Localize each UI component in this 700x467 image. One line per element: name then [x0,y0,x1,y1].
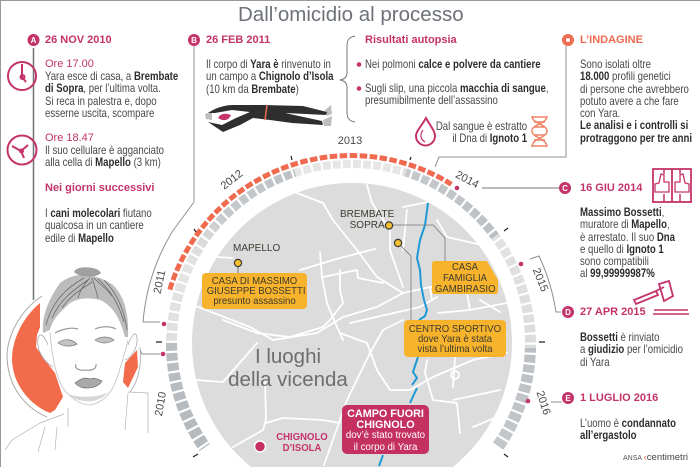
year 2014: 2014 [453,169,481,191]
box text: centro sportivo: vista l’ultima volta [418,343,492,355]
marker D [562,306,574,318]
icon: blood drop [416,118,435,146]
icon: clock 18.47 [8,136,36,164]
icon: gavel [634,281,689,314]
heading C: 16 GIU 2014 [580,182,642,194]
timeline ring: grey segments [166,160,536,467]
text: trial: di Yara [580,355,610,369]
marker A [28,34,40,46]
box text: campo [346,408,425,453]
connector lines and map markers [234,222,445,452]
text: DNA extracted: il Dna di Ignoto 1 [452,131,527,145]
text: DNA extracted [436,119,527,145]
text: blood stain [365,81,549,107]
ears [38,334,137,367]
text: arrest: sono compatibili [580,254,649,268]
year 2011: 2011 [152,269,168,295]
marker E [562,392,574,404]
icon: clock 17.00 [8,62,36,90]
text: body found: (10 km da Brembate) [206,82,299,96]
timeline lines [34,46,566,402]
map of the places [192,183,512,467]
map title: della vicenda [228,368,348,391]
text: sentence: all’ergastolo [580,428,637,442]
orange elapsed-time arc [170,156,451,290]
box text: casa Gambirasio: FAMIGLIA [443,272,487,284]
box text: casa Gambirasio: CASA [452,261,478,273]
label box: campo fuori Chignolo [342,405,429,454]
box text: campo: dov’è stato trovato [346,430,425,441]
river [379,203,428,466]
text: arrest: al 99,99999987% [580,266,655,280]
text: trial: Bossetti è rinviato [580,330,660,344]
box text: casa Bossetti: presunto assassino [213,295,296,307]
icon: DNA [532,116,547,147]
credit: ANSA ‹centimetri [623,452,688,463]
text: arrest: e quello di Ignoto 1 [580,242,664,256]
ring gaps and mask [160,155,542,467]
text: investigation: Le analisi e i controlli si [580,118,688,132]
text: Yara leaves home: esserne uscita, scompare [45,106,154,120]
text: arrest: muratore di Mapello, [580,217,670,231]
marker B [188,34,200,46]
text: sentence [580,416,676,442]
subheading: Nei giorni successivi [45,182,154,194]
text: trial [580,330,683,369]
orange halo [12,303,63,413]
marker A: A [31,36,37,45]
label box: centro sportivo [404,320,506,357]
text: investigation: con Yara. [580,106,620,120]
year 2013: 2013 [338,135,362,147]
time 17.00: Ore 17.00 [45,58,94,70]
text: phone: Il suo cellulare è agganciato [45,143,164,157]
face outline and shading [50,332,128,405]
text: investigation: di persone che avrebbero [580,82,689,96]
text: arrest [580,205,676,280]
hair [43,275,128,337]
year 2010: 2010 [153,391,169,417]
text: blood stain: presumibilmente dell’assassino [365,93,498,107]
year 2015: 2015 [530,266,550,294]
text: investigation: protraggono per tre anni [580,131,692,145]
text: investigation: 18.000 profili genetici [580,69,671,83]
map label: Chignolo d'Isola: CHIGNOLO [276,431,328,443]
box text: casa Gambirasio: GAMBIRASIO [435,283,495,295]
text: lungs: Nei polmoni calce e polvere da cantiere [365,57,541,71]
marker D: D [565,308,571,317]
heading E: 1 LUGLIO 2016 [580,392,658,404]
text: arrest: Massimo Bossetti, [580,205,664,219]
text: Yara leaves home: Si reca in palestra e, dopo [45,94,157,108]
label box: casa Bossetti [202,273,307,309]
map label: Brembate Sopra: SOPRA [350,220,385,231]
marker indagine [564,36,572,44]
marker E: E [565,394,571,403]
box text: casa Bossetti: CASA DI MASSIMO [212,274,297,286]
portrait of Yara [5,267,148,452]
marker C [559,182,571,194]
text: investigation [580,57,692,145]
map label: Brembate Sopra [340,209,394,231]
box text: casa Gambirasio [435,261,496,295]
neck and shoulders [5,392,148,452]
map label: Brembate Sopra: BREMBATE [340,209,394,220]
text: DNA extracted: Dal sangue è estratto [436,119,527,133]
text: phone [45,143,164,169]
text: investigation: Sono isolati oltre [580,57,651,71]
box text: campo: CAMPO FUORI [347,408,424,420]
heading B: 26 FEB 2011 [206,34,270,46]
nose and lips [76,364,96,370]
heading autopsy: Risultati autopsia [365,34,457,46]
label box: casa Gambirasio [432,261,498,294]
text: arrest: è arrestato. Il suo Dna [580,230,675,244]
box text: centro sportivo [409,322,501,355]
text: sentence: L’uomo è condannato [580,416,676,430]
heading investigation: L’INDAGINE [580,34,643,46]
map title: I luoghi [255,345,321,368]
marker C: C [562,184,568,193]
box text: casa Bossetti [207,274,305,307]
time 18.47: Ore 18.47 [45,132,94,144]
text: body found: un campo a Chignolo d’Isola [206,69,334,83]
text: dogs: qualcosa in un cantiere [45,218,144,232]
bullets [357,62,361,91]
title: Dall’omicidio al processo [238,3,464,26]
text: Yara leaves home: di Sopra, per l’ultima volta. [45,81,161,95]
map label: Chignolo d'Isola [276,431,328,454]
text: Yara leaves home [45,69,178,120]
year 2016: 2016 [534,390,552,416]
text: body found: Il corpo di Yara è rinvenuto in [206,57,331,71]
box text: campo: il corpo di Yara [354,442,417,453]
text: Yara leaves home: Yara esce di casa, a Brembate [45,69,178,83]
map roads [193,185,507,465]
year 2012: 2012 [219,168,245,192]
box text: campo: CHIGNOLO [356,419,415,431]
text: blood stain: Sugli slip, una piccola macchia di sangue, [365,81,549,95]
text: dogs: edile di Mapello [45,231,114,245]
box text: casa Bossetti: GIUSEPPE BOSSETTI [207,285,305,297]
eyes and brows [55,327,116,333]
map label: Mapello: MAPELLO [233,243,280,254]
box text: centro sportivo: CENTRO SPORTIVO [409,322,501,334]
timeline dots and ticks [156,156,545,457]
map label: Chignolo d'Isola: D’ISOLA [283,442,321,454]
marker B: B [191,36,197,45]
text: phone: alla cella di Mapello (3 km) [45,155,161,169]
text: body found [206,57,334,96]
text: dogs: I cani molecolari fiutano [45,206,152,220]
box text: centro sportivo: dove Yara è stata [418,333,492,345]
heading D: 27 APR 2015 [580,306,646,318]
map title [228,345,348,391]
icon: prison bars with thumbs [653,169,691,202]
heading A: 26 NOV 2010 [45,34,112,46]
brace [340,36,355,122]
text: investigation: potuto avere a che fare [580,94,679,108]
icon: body of the victim [205,105,332,132]
text: dogs [45,206,152,245]
text: trial: a giudizio per l’omicidio [580,342,683,356]
